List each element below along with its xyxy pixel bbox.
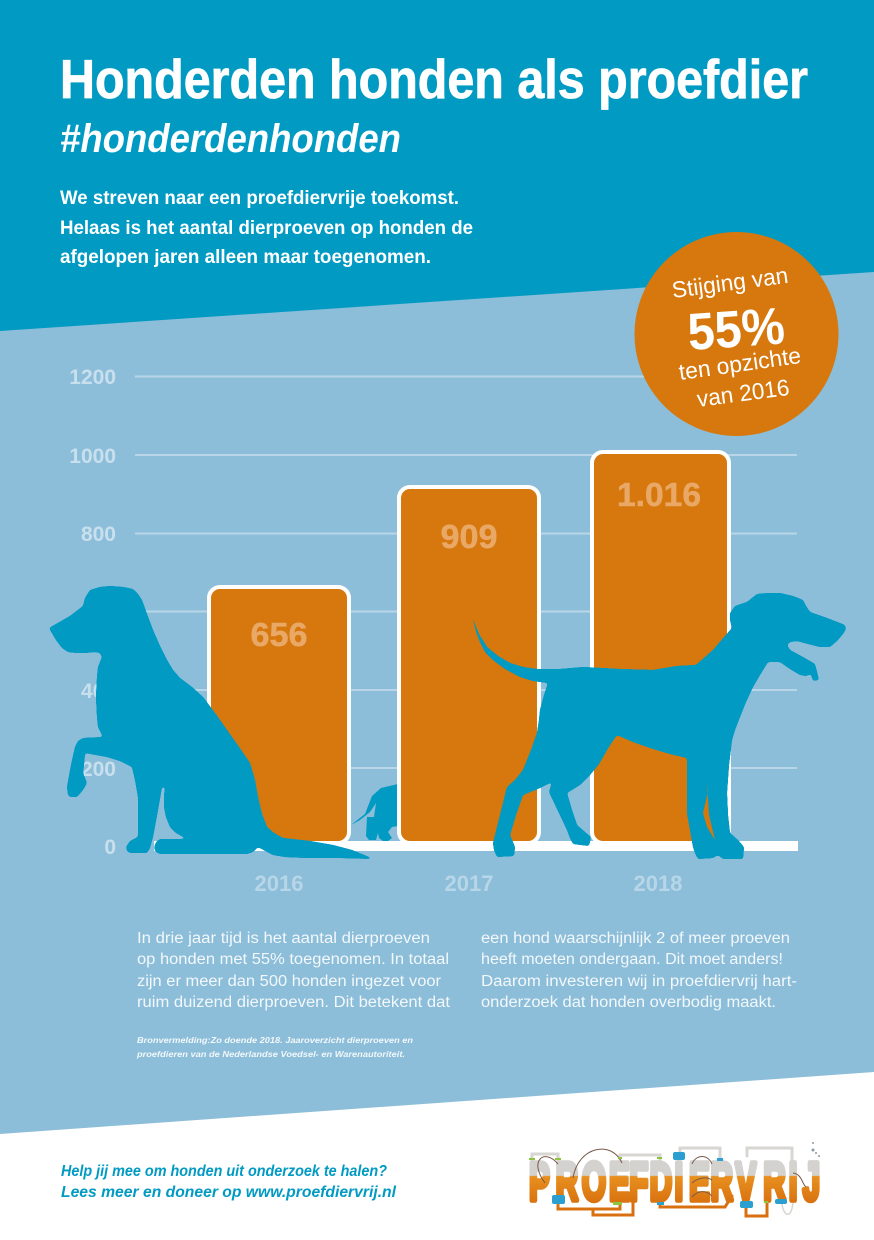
body text: left column: In drie jaar tijd is het aantal dierproeven: [137, 930, 430, 947]
y axis labels: 600: [81, 601, 116, 624]
icon: standing dog: [471, 593, 846, 859]
bar: 2016: [209, 587, 349, 843]
call to action: [61, 1163, 397, 1201]
body text: right column: [481, 930, 797, 1011]
y axis labels: 200: [81, 758, 116, 781]
bar values: 909: [440, 518, 498, 555]
icon: small dog behind bars: [351, 784, 398, 841]
callout: 55% increase badge: Stijging van: [670, 262, 790, 303]
body text: right column: onderzoek dat honden overbodig maakt.: [481, 994, 776, 1011]
intro text: We streven naar een proefdiervrije toekomst.: [60, 188, 459, 209]
panel: bottom white band: [0, 1072, 874, 1240]
body text: left column: [137, 930, 451, 1011]
logo lettering: PROEFDIERVRIJ: [529, 1152, 820, 1212]
logo pipes: [532, 1148, 793, 1216]
source note: [136, 1035, 413, 1059]
icon: sitting dog: [49, 586, 374, 859]
call to action: Lees meer en doneer op www.proefdiervrij.nl: [61, 1184, 397, 1201]
body text: right column: een hond waarschijnlijk 2 of meer proeven: [481, 930, 790, 947]
callout: 55% increase badge: van 2016: [695, 374, 791, 412]
intro text: Helaas is het aantal dierproeven op honden de: [60, 218, 473, 239]
y axis labels: 1000: [69, 445, 116, 468]
intro text: afgelopen jaren alleen maar toegenomen.: [60, 247, 431, 268]
y axis labels: 1200: [69, 366, 116, 389]
body text: left column: ruim duizend dierproeven. Dit betekent dat: [137, 994, 451, 1011]
callout: 55% increase badge: ten opzichte: [677, 342, 802, 385]
logo bubbles: [812, 1142, 820, 1157]
callout: 55% increase badge: [634, 232, 838, 436]
intro text: [60, 188, 473, 268]
y axis labels: 800: [81, 523, 116, 546]
x axis labels: 2016: [255, 871, 303, 896]
logo: Proefdiervrij: [529, 1142, 820, 1216]
y axis labels: 400: [81, 680, 116, 703]
x axis labels: 2018: [634, 871, 682, 896]
bar values: 656: [250, 616, 308, 653]
gap between hind legs: [703, 783, 715, 840]
x axis labels: [255, 871, 682, 896]
logo caps and connectors: [529, 1152, 787, 1208]
y axis labels: 0: [104, 836, 116, 859]
bar: 2018: [592, 452, 729, 843]
call to action: Help jij mee om honden uit onderzoek te halen?: [61, 1163, 387, 1180]
panel: top header band: [0, 0, 874, 331]
hashtag subtitle: #honderdenhonden: [60, 117, 401, 161]
source note: Bronvermelding:Zo doende 2018. Jaaroverzicht dierproeven en: [137, 1035, 413, 1045]
logo tubing arcs: [538, 1149, 806, 1197]
callout: 55% increase badge: 55%: [686, 297, 787, 362]
source note: proefdieren van de Nederlandse Voedsel- en Warenautoriteit.: [136, 1049, 405, 1059]
body text: right column: Daarom investeren wij in proefdiervrij hart-: [481, 973, 797, 990]
x axis labels: 2017: [445, 871, 493, 896]
x axis baseline: [154, 841, 798, 851]
bar values: 1.016: [617, 476, 701, 513]
baseline cover: [207, 841, 798, 851]
y axis labels: [69, 366, 116, 859]
grid lines: [135, 376, 797, 768]
bar chart: [69, 366, 798, 896]
body text: right column: heeft moeten ondergaan. Dit moet anders!: [481, 951, 783, 968]
body text: left column: zijn er meer dan 500 honden ingezet voor: [137, 973, 441, 990]
tail tip: [473, 619, 484, 644]
bar: 2017: [399, 487, 539, 843]
body text: left column: op honden met 55% toegenomen. In totaal: [137, 951, 449, 968]
bar values: [250, 476, 701, 653]
